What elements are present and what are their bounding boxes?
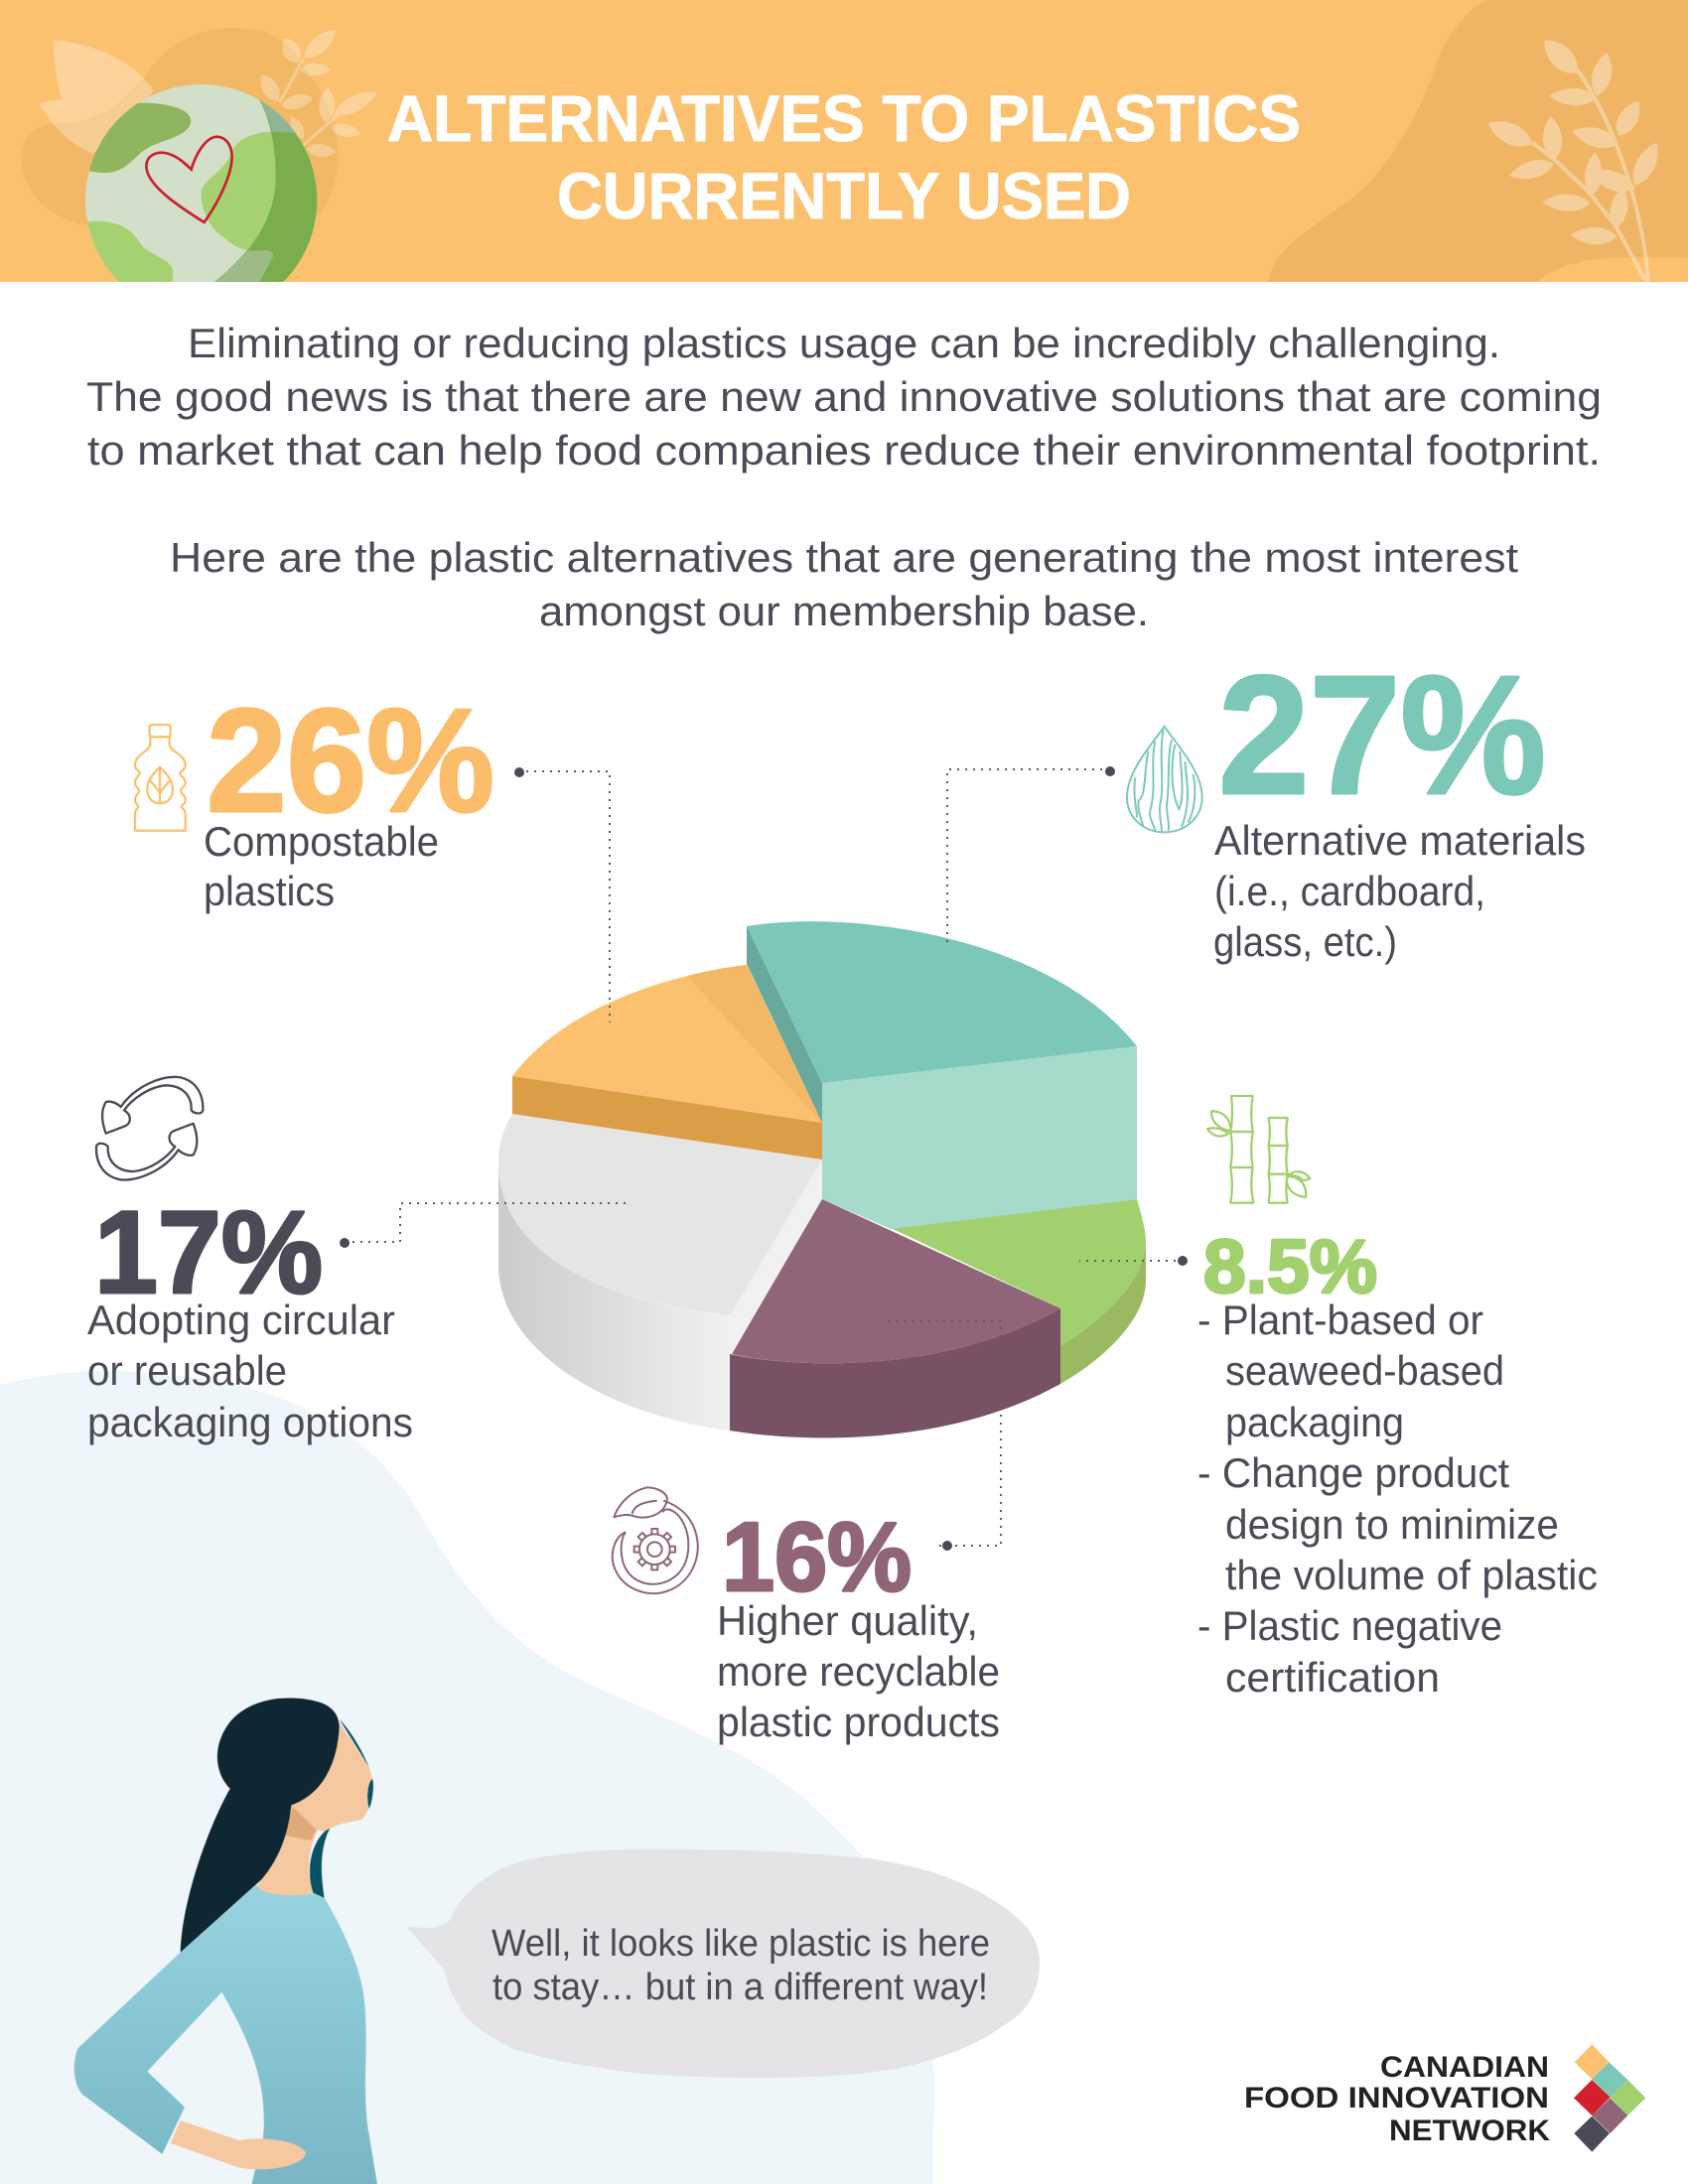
- intro text: [86, 320, 1602, 634]
- character: woman: [74, 1698, 377, 2184]
- icon: gear and leaf: [613, 1487, 698, 1593]
- icon: circular arrows: [96, 1077, 203, 1179]
- background blob: [0, 1371, 934, 2184]
- title: [387, 81, 1301, 232]
- slice: teal 27%: [747, 921, 1137, 1229]
- label: - Plastic negative: [1197, 1602, 1502, 1649]
- label: seaweed-based: [1225, 1347, 1504, 1394]
- icon: wood drop: [1127, 727, 1202, 832]
- icon: bottle: [135, 725, 186, 831]
- header right decoration: [1268, 0, 1688, 283]
- logo text: [1244, 2051, 1550, 2147]
- label: Compostable: [204, 818, 439, 865]
- intro text: to market that can help food companies reduce their environmental footprint.: [87, 427, 1601, 474]
- label: - Change product: [1197, 1449, 1509, 1496]
- speech text: [492, 1923, 990, 2008]
- logo text: NETWORK: [1389, 2115, 1550, 2147]
- icon: bamboo: [1207, 1096, 1310, 1203]
- label: [1213, 817, 1586, 965]
- label: Higher quality,: [717, 1597, 978, 1644]
- logo text: CANADIAN: [1380, 2051, 1549, 2084]
- connector lines: [352, 769, 1176, 1546]
- logo text: FOOD INNOVATION: [1244, 2082, 1549, 2115]
- value: 27%: [1218, 641, 1546, 830]
- intro text: Here are the plastic alternatives that are generating the most interest: [170, 534, 1518, 581]
- icon: right leaf branch: [1483, 33, 1665, 281]
- speech bubble: [406, 1849, 1040, 2078]
- value: 16%: [722, 1502, 912, 1611]
- label: plastics: [204, 868, 335, 914]
- label: - Plant-based or: [1197, 1297, 1483, 1343]
- stat: 27% alternative materials: [1127, 641, 1586, 965]
- label: [87, 1297, 413, 1445]
- label: more recyclable: [717, 1648, 1000, 1695]
- label: glass, etc.): [1213, 918, 1397, 965]
- label: packaging options: [87, 1399, 413, 1445]
- icon: earth with heart: [82, 82, 321, 285]
- slice: orange 26%: [512, 965, 822, 1160]
- icon: small left branch: [260, 30, 377, 157]
- value: 26%: [207, 679, 494, 843]
- slice: purple 16%: [730, 1199, 1060, 1437]
- intro text: Eliminating or reducing plastics usage can be incredibly challenging.: [188, 320, 1500, 366]
- speech text: to stay… but in a different way!: [492, 1967, 988, 2008]
- label: [717, 1597, 1000, 1745]
- connector dots: [340, 766, 1188, 1551]
- logo mark: [1574, 2044, 1645, 2152]
- label: [1197, 1297, 1598, 1701]
- slice: green 8.5%: [891, 1199, 1146, 1384]
- label: Adopting circular: [87, 1297, 395, 1343]
- title: CURRENTLY USED: [557, 159, 1131, 232]
- label: or reusable: [87, 1347, 287, 1394]
- pie chart: [498, 921, 1146, 1437]
- header left decoration: [22, 24, 380, 285]
- intro text: The good news is that there are new and innovative solutions that are coming: [86, 373, 1602, 420]
- label: the volume of plastic: [1225, 1552, 1598, 1598]
- stat: 16% recyclable plastic: [613, 1487, 1000, 1745]
- value: 8.5%: [1203, 1225, 1377, 1309]
- label: [204, 818, 439, 914]
- stat: 17% circular packaging: [87, 1077, 413, 1445]
- icon: large pale leaves: [39, 40, 154, 154]
- header banner: [0, 0, 1688, 285]
- label: Alternative materials: [1214, 817, 1586, 864]
- label: design to minimize: [1225, 1501, 1559, 1548]
- value: 17%: [94, 1187, 323, 1318]
- speech text: Well, it looks like plastic is here: [492, 1923, 990, 1965]
- stat: 26% compostable plastics: [135, 679, 494, 914]
- logo: Canadian Food Innovation Network: [1244, 2044, 1645, 2152]
- label: (i.e., cardboard,: [1214, 868, 1485, 914]
- intro text: amongst our membership base.: [539, 588, 1149, 634]
- label: packaging: [1225, 1399, 1404, 1445]
- label: plastic products: [717, 1699, 1000, 1745]
- stat: 8.5% plant-based: [1197, 1096, 1598, 1701]
- label: certification: [1225, 1654, 1440, 1701]
- title: ALTERNATIVES TO PLASTICS: [387, 81, 1301, 155]
- slice: grey 17%: [498, 1114, 822, 1431]
